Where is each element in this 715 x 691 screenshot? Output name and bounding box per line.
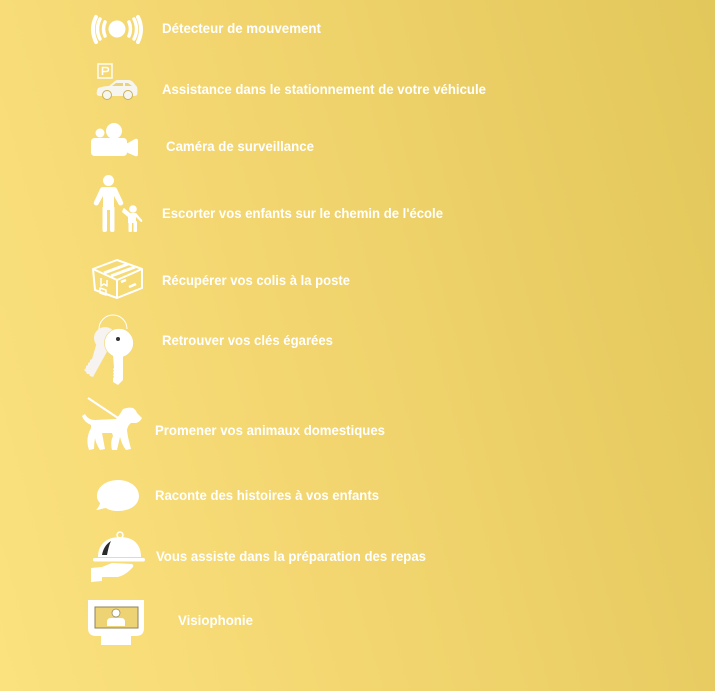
label: parking assistance: Assistance dans le stationnement de votre véhicule bbox=[162, 81, 486, 97]
icon: adult and child bbox=[94, 175, 142, 232]
label: motion sensor: Détecteur de mouvement bbox=[162, 20, 321, 36]
icon: video camera bbox=[91, 123, 138, 156]
label: video calling: Visiophonie bbox=[178, 612, 253, 628]
icon: parcel box bbox=[93, 260, 142, 298]
label: tells stories: Raconte des histoires à vos enfants bbox=[155, 487, 379, 503]
icon: keys bbox=[84, 315, 134, 385]
icon: parking car bbox=[97, 64, 138, 100]
icon: dog on leash bbox=[82, 398, 142, 450]
icon: video phone bbox=[88, 600, 144, 645]
icon: serving cloche bbox=[91, 532, 145, 582]
label: collect parcels: Récupérer vos colis à la poste bbox=[162, 272, 350, 288]
label: escort children: Escorter vos enfants sur le chemin de l'école bbox=[162, 205, 443, 221]
icon: speech bubble bbox=[96, 480, 139, 511]
label: surveillance camera: Caméra de surveillance bbox=[166, 138, 314, 154]
label: meal preparation: Vous assiste dans la préparation des repas bbox=[156, 548, 426, 564]
icon: motion sensor bbox=[93, 17, 141, 42]
label: walk pets: Promener vos animaux domestiques bbox=[155, 422, 385, 438]
label: find lost keys: Retrouver vos clés égarées bbox=[162, 332, 333, 348]
